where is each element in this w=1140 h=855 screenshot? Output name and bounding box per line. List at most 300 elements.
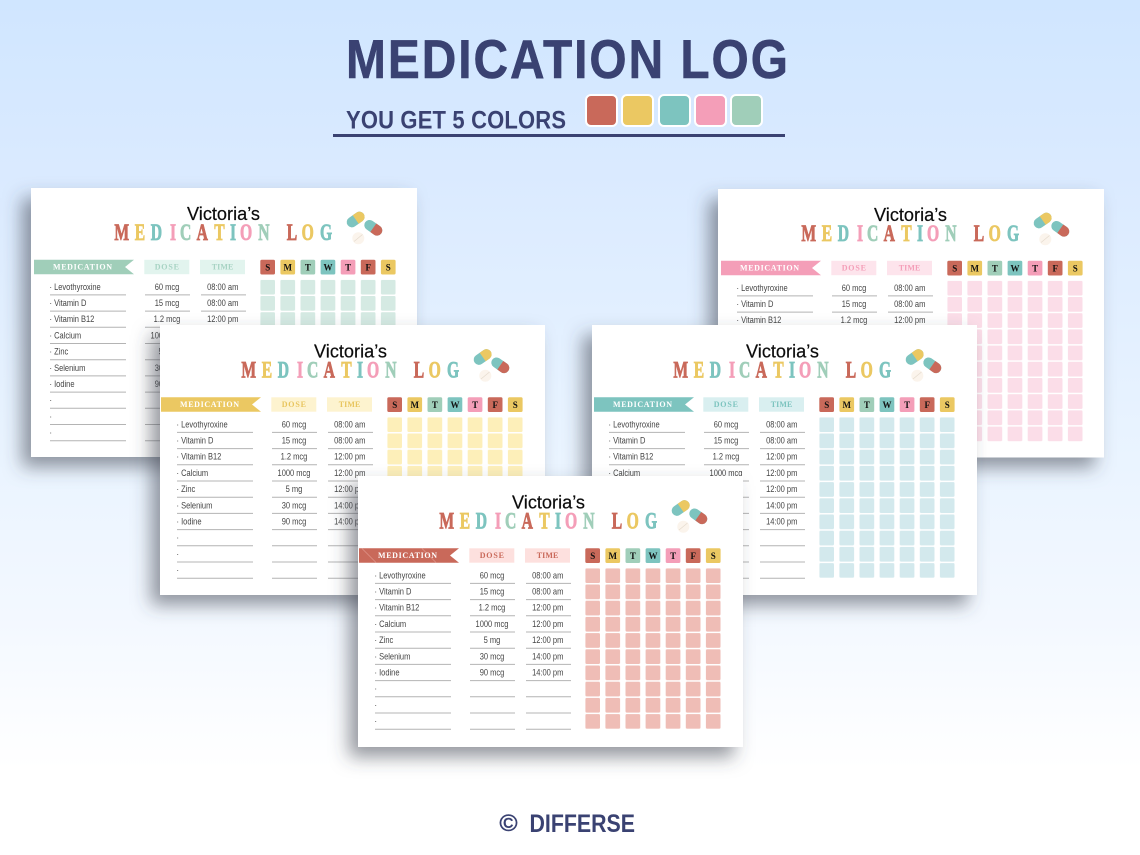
times: 12:00 pm [334, 451, 365, 462]
times: 12:00 pm [207, 346, 238, 357]
log title [241, 357, 459, 383]
tracking grid [947, 281, 1083, 441]
medication banner [34, 260, 134, 274]
log title: A [197, 220, 209, 246]
icon: pills [904, 347, 943, 382]
icon: pills [1032, 211, 1071, 245]
times: 12:00 pm [532, 618, 563, 629]
medication names: · Calcium [176, 467, 208, 478]
icon: pills [670, 498, 709, 533]
log title: O [627, 508, 639, 534]
log title: T [773, 357, 784, 383]
log title: O [367, 357, 379, 383]
name heading: Victoria’s [874, 204, 947, 225]
dose header: DOSE [842, 263, 866, 272]
doses: 60 mcg [282, 418, 307, 430]
weekday tiles: S [590, 551, 595, 561]
medication names: · Selenium [176, 499, 212, 511]
log title: C [307, 357, 318, 383]
doses: 1.2 mcg [479, 602, 506, 613]
weekday tiles: T [904, 400, 910, 410]
log title: G [1007, 221, 1019, 247]
times: 08:00 am [207, 297, 238, 308]
medication names: · Levothyroxine [608, 418, 660, 430]
weekday tiles [947, 261, 1083, 276]
log title: I [789, 357, 795, 383]
weekday tiles [585, 548, 721, 563]
log title: D [476, 508, 487, 534]
log title: I [297, 357, 303, 383]
medication names: · [50, 411, 52, 422]
doses: 60 mcg [480, 569, 505, 581]
medication names: · Calcium [736, 331, 768, 342]
medication names: · [608, 532, 611, 543]
doses: 15 mcg [480, 586, 505, 597]
weekday tiles: T [345, 262, 351, 272]
name heading: Victoria’s [746, 340, 819, 361]
log title [673, 357, 891, 383]
log title: T [214, 220, 225, 246]
icon: pills [472, 347, 511, 382]
medication banner: MEDICATION [53, 262, 112, 271]
medication names: · Zinc [374, 634, 394, 645]
log title: O [989, 221, 1001, 247]
log title: M [801, 221, 816, 247]
times [207, 281, 238, 389]
medication banner: MEDICATION [613, 400, 672, 409]
dose header: DOSE [480, 551, 504, 560]
panel: pink log [718, 189, 1104, 458]
medication names: · [176, 548, 179, 559]
log title: N [258, 220, 270, 246]
time header: TIME [899, 263, 920, 272]
tracking grid [260, 280, 396, 440]
medication banner [359, 548, 459, 563]
medication names: · Levothyroxine [736, 282, 788, 293]
log title: A [884, 221, 896, 247]
doses: 1.2 mcg [841, 314, 868, 325]
weekday tiles: S [392, 400, 397, 410]
log title: N [945, 221, 957, 247]
medication names: · Vitamin B12 [374, 602, 420, 613]
log title: G [879, 357, 891, 383]
log title [439, 508, 657, 534]
doses: 30 mcg [282, 499, 307, 511]
colour swatches [586, 95, 762, 126]
doses: 60 mcg [155, 281, 180, 292]
doses: 5 mg [159, 346, 176, 357]
weekday tiles: M [609, 551, 618, 561]
log title: L [974, 221, 984, 247]
medication names: · Vitamin D [176, 435, 213, 446]
doses: 15 mcg [155, 297, 180, 308]
time header: TIME [212, 262, 233, 271]
log title: O [927, 221, 939, 247]
medication names: · Vitamin B12 [50, 313, 95, 324]
log title: A [756, 357, 768, 383]
weekday tiles: T [630, 551, 636, 561]
weekday tiles: S [711, 551, 716, 561]
times [894, 282, 925, 390]
times: 12:00 pm [766, 451, 797, 462]
log title: C [739, 357, 750, 383]
weekday tiles: S [513, 400, 518, 410]
log title: I [555, 508, 561, 534]
times: 08:00 am [334, 435, 365, 446]
log title: A [324, 357, 336, 383]
times: 12:00 pm [207, 330, 238, 341]
medication names: · Vitamin D [736, 298, 773, 309]
medication names: · [608, 548, 611, 559]
log title [801, 221, 1019, 247]
weekday tiles: T [670, 551, 676, 561]
log title: N [385, 357, 397, 383]
medication banner [161, 397, 261, 412]
times: 12:00 pm [894, 314, 925, 325]
doses: 30 mcg [155, 362, 180, 373]
medication names: · Levothyroxine [50, 281, 101, 292]
weekday tiles: W [648, 551, 658, 561]
dose header [144, 260, 189, 274]
panel: red log [358, 476, 743, 747]
name heading: Victoria’s [314, 340, 387, 361]
log title: M [241, 357, 256, 383]
log title: A [522, 508, 534, 534]
medication names: · Selenium [608, 499, 644, 511]
times: 08:00 am [532, 569, 563, 581]
medication names: · Zinc [608, 483, 628, 494]
times: 08:00 am [207, 281, 238, 292]
log title: O [565, 508, 577, 534]
times: 14:00 pm [766, 516, 797, 527]
log title: D [151, 220, 162, 246]
time header [525, 548, 570, 563]
medication names: · Selenium [374, 650, 410, 662]
time header [887, 261, 932, 275]
log title: O [302, 220, 314, 246]
medication names: · [50, 394, 52, 405]
weekday tiles: T [432, 400, 438, 410]
log title: O [861, 357, 873, 383]
times: 12:00 pm [207, 313, 238, 324]
medication names: · Iodine [608, 516, 634, 527]
log title: I [230, 220, 236, 246]
tracking grid [585, 568, 721, 729]
doses: 60 mcg [714, 418, 739, 430]
log title: I [857, 221, 863, 247]
medication names: · Vitamin B12 [736, 314, 782, 325]
medication names [374, 569, 426, 726]
doses: 1000 mcg [710, 467, 743, 478]
weekday tiles: F [492, 400, 498, 410]
log title: E [460, 508, 470, 534]
dose header [831, 261, 876, 275]
medication banner: MEDICATION [180, 400, 239, 409]
medication banner: MEDICATION [378, 551, 437, 560]
log title: O [429, 357, 441, 383]
weekday tiles [260, 260, 396, 274]
times: 08:00 am [334, 418, 365, 430]
medication names [608, 418, 660, 575]
log title: T [901, 221, 912, 247]
medication names [176, 418, 228, 575]
doses: 90 mcg [480, 667, 505, 678]
medication names: · Levothyroxine [374, 569, 426, 581]
times: 14:00 pm [334, 516, 365, 527]
doses [476, 569, 509, 678]
weekday tiles: T [305, 262, 311, 272]
doses: 5 mg [286, 483, 303, 494]
times: 14:00 pm [532, 650, 563, 662]
doses: 5 mg [846, 347, 863, 358]
doses [278, 418, 311, 527]
doses: 1000 mcg [476, 618, 509, 629]
log title: G [447, 357, 459, 383]
medication names: · Levothyroxine [176, 418, 228, 430]
doses [151, 281, 184, 389]
medication names: · Calcium [374, 618, 406, 629]
medication names: · [736, 428, 739, 439]
weekday tiles: T [472, 400, 478, 410]
name heading: Victoria’s [187, 203, 260, 224]
dose header [703, 397, 748, 412]
doses: 1000 mcg [838, 331, 871, 342]
medication banner [721, 261, 821, 275]
log title: O [240, 220, 252, 246]
time header [759, 397, 804, 412]
medication names [736, 282, 788, 439]
log title: T [539, 508, 550, 534]
log title: T [341, 357, 352, 383]
medication names: · Iodine [176, 516, 202, 527]
title: MEDICATION LOG [346, 28, 788, 90]
doses: 1.2 mcg [281, 451, 308, 462]
times: 14:00 pm [894, 379, 925, 390]
medication names: · [176, 564, 179, 575]
weekday tiles: T [1032, 263, 1038, 273]
subtitle underline [333, 134, 785, 137]
medication names: · [374, 715, 377, 726]
times: 14:00 pm [207, 362, 238, 373]
log title: G [645, 508, 657, 534]
weekday tiles: M [971, 263, 980, 273]
times: 12:00 pm [766, 467, 797, 478]
log title: L [287, 220, 297, 246]
times [766, 418, 797, 527]
doses: 90 mcg [714, 516, 739, 527]
medication names: · Selenium [50, 362, 85, 373]
medication names: · Vitamin B12 [608, 451, 654, 462]
doses: 1000 mcg [151, 330, 184, 341]
time header [327, 397, 372, 412]
doses: 60 mcg [842, 282, 867, 293]
times: 12:00 pm [766, 483, 797, 494]
log title: I [357, 357, 363, 383]
doses: 1.2 mcg [154, 313, 181, 324]
tracking grid [387, 417, 523, 578]
times: 12:00 pm [894, 347, 925, 358]
weekday tiles: S [945, 400, 950, 410]
doses: 30 mcg [714, 499, 739, 511]
log title: I [170, 220, 176, 246]
time header: TIME [537, 551, 558, 560]
medication names: · [608, 564, 611, 575]
doses: 90 mcg [155, 378, 180, 389]
weekday tiles: S [1073, 263, 1078, 273]
log title: M [114, 220, 129, 246]
weekday tiles: S [824, 400, 829, 410]
weekday tiles [819, 397, 955, 412]
dose header [271, 397, 316, 412]
footer credit: © [500, 810, 518, 836]
log title: L [414, 357, 424, 383]
medication names: · Vitamin D [374, 586, 411, 597]
medication names: · Iodine [736, 379, 762, 390]
times: 12:00 pm [334, 467, 365, 478]
panel: yellow log [160, 325, 545, 595]
weekday tiles: F [1052, 263, 1058, 273]
log title: D [278, 357, 289, 383]
log title: C [867, 221, 878, 247]
times: 08:00 am [894, 298, 925, 309]
log title: E [135, 220, 145, 246]
doses: 15 mcg [842, 298, 867, 309]
weekday tiles: M [411, 400, 420, 410]
weekday tiles: M [843, 400, 852, 410]
times: 14:00 pm [334, 499, 365, 511]
doses: 1.2 mcg [713, 451, 740, 462]
subtitle: YOU GET 5 COLORS [346, 106, 566, 134]
medication names: · Zinc [736, 347, 756, 358]
medication names: · Vitamin B12 [176, 451, 222, 462]
medication names: · Vitamin D [608, 435, 645, 446]
times: 14:00 pm [532, 667, 563, 678]
doses [710, 418, 743, 527]
doses: 15 mcg [282, 435, 307, 446]
times: 08:00 am [532, 586, 563, 597]
doses: 30 mcg [842, 363, 867, 374]
medication names [50, 281, 101, 438]
medication names: · Iodine [50, 378, 75, 389]
log title: I [495, 508, 501, 534]
log title [114, 220, 332, 246]
tracking grid [819, 417, 955, 578]
weekday tiles: W [1010, 263, 1020, 273]
log title: I [917, 221, 923, 247]
doses: 15 mcg [714, 435, 739, 446]
medication names: · Vitamin D [50, 297, 86, 308]
log title: E [262, 357, 272, 383]
doses: 90 mcg [282, 516, 307, 527]
doses: 30 mcg [480, 650, 505, 662]
times [334, 418, 365, 527]
medication names: · Calcium [608, 467, 640, 478]
log title: E [822, 221, 832, 247]
times: 12:00 pm [532, 634, 563, 645]
panel: green log [31, 188, 417, 457]
weekday tiles: F [690, 551, 696, 561]
medication names: · Selenium [736, 363, 772, 374]
medication banner: MEDICATION [740, 263, 799, 272]
times: 08:00 am [894, 282, 925, 293]
weekday tiles: M [284, 262, 293, 272]
dose header: DOSE [155, 262, 179, 271]
panel: blue log [592, 325, 977, 595]
times [532, 569, 563, 678]
log title: C [505, 508, 516, 534]
times: 08:00 am [766, 418, 797, 430]
medication names: · [176, 532, 179, 543]
doses: 5 mg [718, 483, 735, 494]
log title: D [710, 357, 721, 383]
time header: TIME [339, 400, 360, 409]
weekday tiles: F [924, 400, 930, 410]
medication names: · [50, 427, 52, 438]
medication names: · Iodine [374, 667, 400, 678]
medication names: · Zinc [176, 483, 196, 494]
log title: L [846, 357, 856, 383]
log title: G [320, 220, 332, 246]
log title: N [817, 357, 829, 383]
weekday tiles: S [386, 262, 391, 272]
weekday tiles [387, 397, 523, 412]
time header [200, 260, 245, 274]
medication names: · [374, 683, 377, 694]
weekday tiles: T [992, 263, 998, 273]
time header: TIME [771, 400, 792, 409]
weekday tiles: S [952, 263, 957, 273]
log title: L [612, 508, 622, 534]
name heading: Victoria’s [512, 491, 585, 512]
doses: 1000 mcg [278, 467, 311, 478]
dose header: DOSE [282, 400, 306, 409]
weekday tiles: W [882, 400, 892, 410]
times: 12:00 pm [894, 331, 925, 342]
log title: M [673, 357, 688, 383]
weekday tiles: W [324, 262, 332, 272]
times: 14:00 pm [207, 378, 238, 389]
footer credit [500, 810, 635, 838]
weekday tiles: F [365, 262, 371, 272]
doses: 90 mcg [842, 379, 867, 390]
times: 14:00 pm [766, 499, 797, 511]
times: 14:00 pm [894, 363, 925, 374]
log title: M [439, 508, 454, 534]
dose header [469, 548, 514, 563]
medication names: · Calcium [50, 330, 81, 341]
log title: E [694, 357, 704, 383]
medication names: · [736, 395, 739, 406]
medication names: · [736, 412, 739, 423]
doses: 5 mg [484, 634, 501, 645]
times: 08:00 am [766, 435, 797, 446]
medication names: · Zinc [50, 346, 69, 357]
weekday tiles: T [864, 400, 870, 410]
medication names: · [374, 699, 377, 710]
doses [838, 282, 871, 390]
weekday tiles: W [450, 400, 460, 410]
weekday tiles: S [265, 262, 270, 272]
medication banner [594, 397, 694, 412]
log title: N [583, 508, 595, 534]
dose header: DOSE [714, 400, 738, 409]
times: 12:00 pm [334, 483, 365, 494]
log title: O [799, 357, 811, 383]
icon: pills [345, 210, 384, 244]
footer credit: DIFFERSE [530, 810, 635, 838]
log title: I [729, 357, 735, 383]
log title: D [838, 221, 849, 247]
